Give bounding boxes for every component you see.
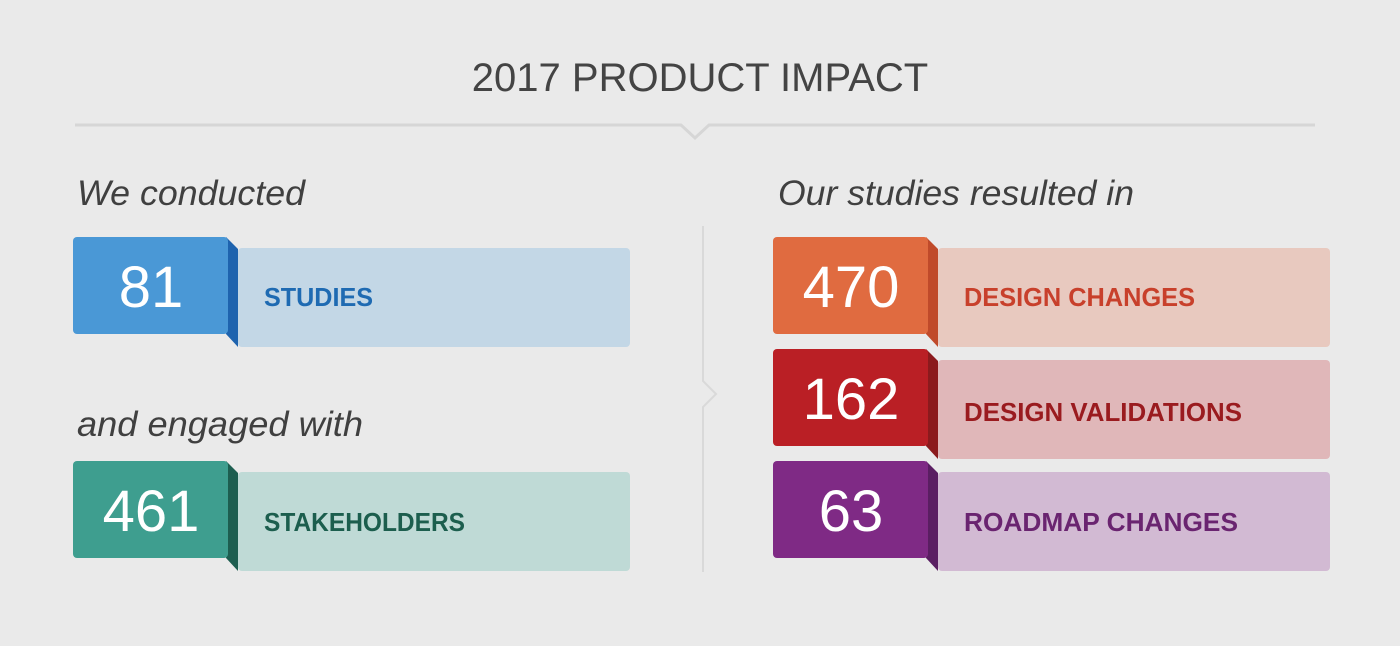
card: design changes: 470: [803, 255, 899, 320]
card: design validations: DESIGN VALIDATIONS: [964, 399, 1242, 427]
card: design validations: [773, 349, 1330, 459]
card: design changes: DESIGN CHANGES: [964, 284, 1195, 312]
heading: we conducted: We conducted: [77, 173, 306, 213]
card: design validations: 162: [803, 367, 899, 432]
card: stakeholders: [73, 461, 630, 571]
card: stakeholders: 461: [103, 479, 199, 544]
card: roadmap changes: [773, 461, 1330, 571]
card: design changes: [773, 237, 1330, 347]
card: studies: 81: [119, 255, 183, 320]
heading: engaged with: and engaged with: [77, 404, 363, 444]
card: studies: [73, 237, 630, 347]
card: studies: STUDIES: [264, 284, 373, 312]
title: 2017 PRODUCT IMPACT: [472, 56, 928, 100]
heading: results: Our studies resulted in: [778, 173, 1134, 213]
card: roadmap changes: ROADMAP CHANGES: [964, 509, 1238, 537]
card: stakeholders: STAKEHOLDERS: [264, 509, 465, 537]
card: roadmap changes: 63: [819, 479, 883, 544]
